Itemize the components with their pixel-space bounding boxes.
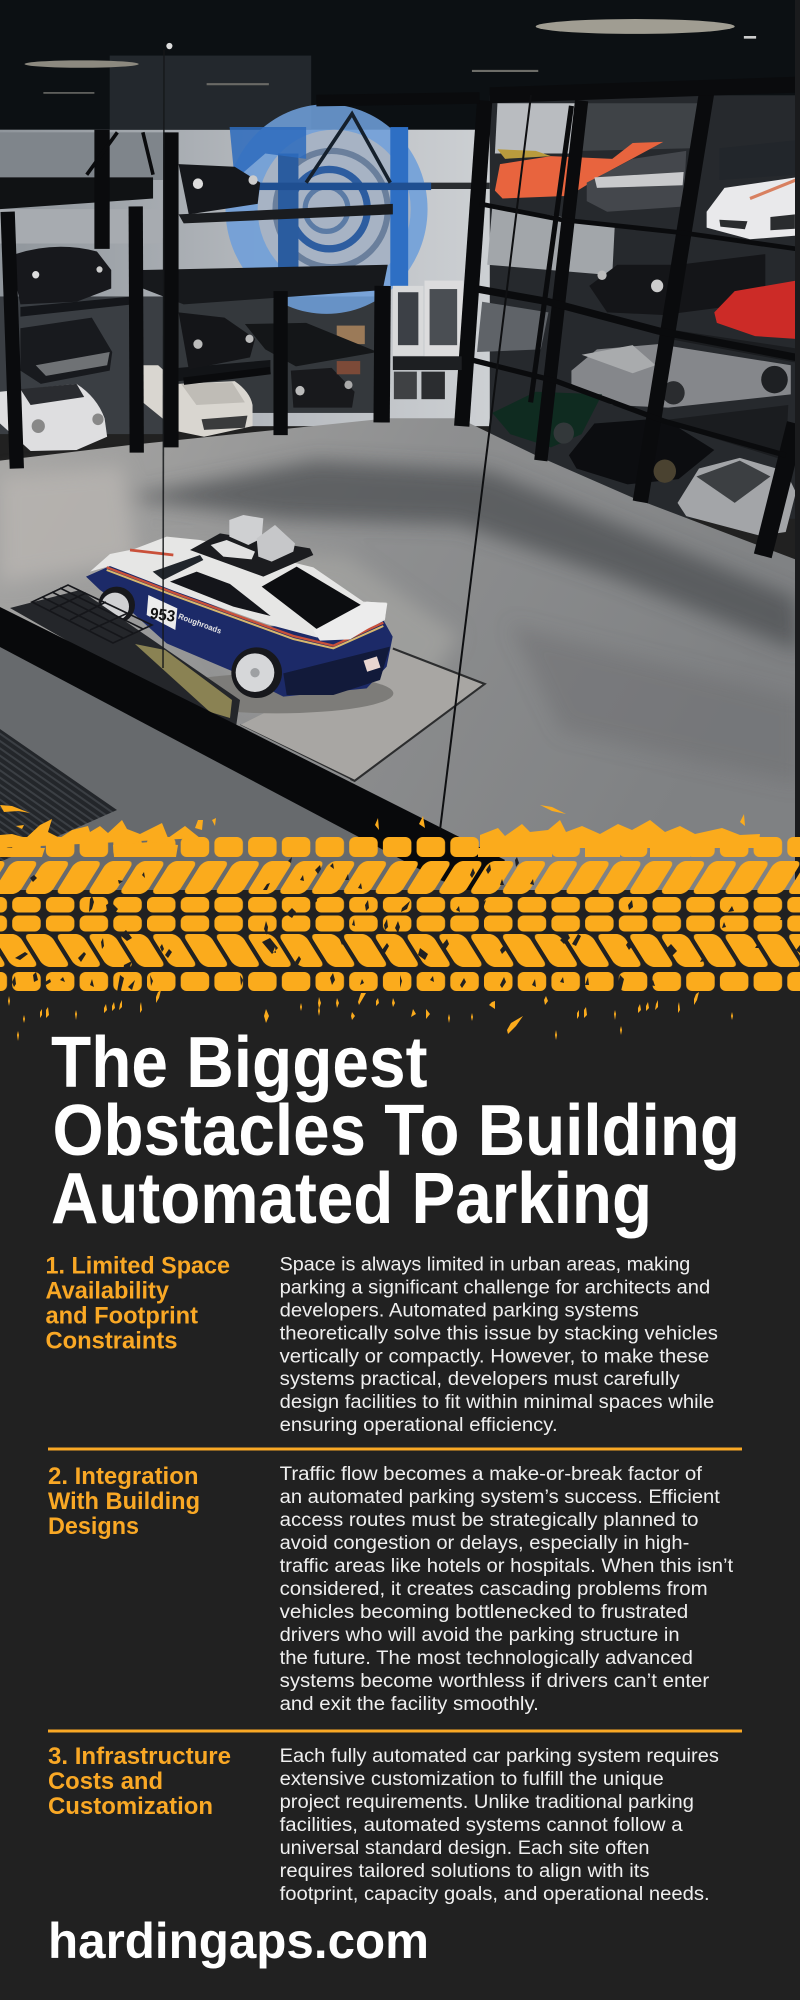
orange debris below tread (8, 990, 733, 1041)
body text 1: ensuring operational efficiency. (280, 1415, 558, 1436)
heading 1: Constraints (46, 1328, 178, 1354)
heading 3: 3. Infrastructure (48, 1743, 231, 1770)
body text 2: avoid congestion or delays, especially in high- (280, 1533, 689, 1554)
section 2: integration (48, 1463, 734, 1715)
body text 3: universal standard design. Each site often (280, 1838, 650, 1859)
floor shadows (0, 461, 800, 784)
parked cars, left bays (0, 164, 360, 451)
ceiling (0, 0, 800, 159)
blue swirl logo (226, 104, 431, 314)
concrete floor (0, 418, 800, 900)
heading 2: With Building (48, 1488, 200, 1515)
parked cars, right bays (492, 140, 796, 536)
tread row 4 (0, 916, 800, 932)
heading 3: Customization (48, 1793, 213, 1820)
body text 1: developers. Automated parking systems (280, 1300, 639, 1321)
black ledge band (0, 607, 505, 895)
tread row 6 (0, 972, 800, 991)
body text 3: footprint, capacity goals, and operational needs. (280, 1884, 710, 1905)
ink splatter above tread (0, 805, 760, 857)
ceiling panel reflection (110, 56, 311, 130)
main car: rally porsche with roof rack (86, 515, 393, 713)
white upper body (90, 537, 387, 639)
tread row 1 (0, 837, 800, 857)
heading 2 (48, 1463, 200, 1540)
right edge strip (795, 0, 800, 893)
table and chairs (393, 356, 462, 399)
body text 3: project requirements. Unlike traditional parking (280, 1792, 694, 1813)
tread row 5 slanted (0, 934, 800, 967)
ceiling lights (24, 19, 756, 94)
gear on ledge (10, 590, 240, 727)
rear wall (0, 95, 800, 519)
heading 2: 2. Integration (48, 1463, 198, 1490)
rear bumper (283, 647, 390, 695)
shelf platforms and racks, left (0, 177, 393, 381)
body text 1: vertically or compactly. However, to make these (280, 1346, 709, 1367)
photo: automated parking garage (0, 0, 800, 1000)
wheels (98, 587, 282, 698)
car shadow (160, 673, 393, 713)
website footer: hardingaps.com (48, 1913, 429, 1969)
body text 2: and exit the facility smoothly. (280, 1694, 539, 1715)
garage interior, drawn in upscaled coordinates (0, 0, 800, 900)
body text 3: requires tailored solutions to align with its (280, 1861, 650, 1882)
title: Obstacles To Building (52, 1091, 740, 1171)
tread row 2 slanted (0, 861, 800, 894)
rack columns (8, 85, 796, 556)
glass ledge with items (0, 585, 520, 895)
body text 2: traffic areas like hotels or hospitals. When this isn’t (280, 1556, 734, 1577)
body text 1: Space is always limited in urban areas, making (280, 1254, 690, 1276)
body text 2: an automated parking system’s success. Efficient (280, 1487, 721, 1508)
rally stripes (107, 567, 383, 646)
body text 2: systems become worthless if drivers can’t enter (280, 1671, 710, 1692)
roof rack and luggage (190, 515, 313, 577)
title: Automated Parking (51, 1159, 652, 1239)
body text 2: the future. The most technologically advanced (280, 1648, 693, 1669)
body text 1: systems practical, developers must carefully (280, 1369, 680, 1390)
tread row 3 (0, 897, 800, 912)
heading 1 (46, 1252, 230, 1354)
basket (32, 585, 152, 643)
doors at back (337, 281, 463, 358)
body text 1: parking a significant challenge for architects and (280, 1277, 710, 1298)
body text 2: vehicles becoming bottlenecked to frustrated (280, 1602, 688, 1623)
section 3: infrastructure (48, 1743, 719, 1905)
title (51, 1023, 740, 1239)
body text 1 (280, 1254, 718, 1436)
body text 2: considered, it creates cascading problems from (280, 1579, 708, 1600)
heading 1: 1. Limited Space (46, 1252, 230, 1280)
body text 3 (280, 1746, 719, 1905)
glass reflection lines (163, 50, 531, 830)
body text 2 (280, 1464, 734, 1715)
heading 1: and Footprint (46, 1302, 198, 1330)
section 1: limited space (46, 1252, 718, 1436)
race number panel (147, 595, 223, 636)
title: The Biggest (51, 1023, 428, 1103)
race number panel: 953 (149, 605, 176, 626)
lower navy body (86, 566, 393, 697)
dark wear marks on tread (12, 857, 800, 996)
heading 3 (48, 1743, 231, 1820)
heading 1: Availability (46, 1278, 169, 1304)
body text 2: access routes must be strategically planned to (280, 1510, 698, 1531)
windows (153, 555, 203, 580)
body text 2: Traffic flow becomes a make-or-break factor of (280, 1464, 703, 1485)
race number panel: Roughroads (177, 612, 223, 636)
body text 1: design facilities to fit within minimal spaces while (280, 1392, 714, 1413)
body text 3: facilities, automated systems cannot follow a (280, 1815, 683, 1836)
body text 3: extensive customization to fulfill the unique (280, 1769, 664, 1790)
body text 1: theoretically solve this issue by stacking vehicles (280, 1323, 718, 1344)
lower edge of photo under tread (0, 890, 800, 1000)
body text 3: Each fully automated car parking system requires (280, 1746, 719, 1767)
rear glass and wing (262, 567, 367, 629)
heading 3: Costs and (48, 1768, 163, 1795)
floor mat (0, 729, 117, 862)
body text 2: drivers who will avoid the parking structure in (280, 1625, 680, 1646)
parking bay outline (240, 649, 485, 781)
heading 2: Designs (48, 1513, 139, 1540)
tire tread graphic (0, 805, 800, 1041)
lower tile floor (0, 640, 520, 895)
